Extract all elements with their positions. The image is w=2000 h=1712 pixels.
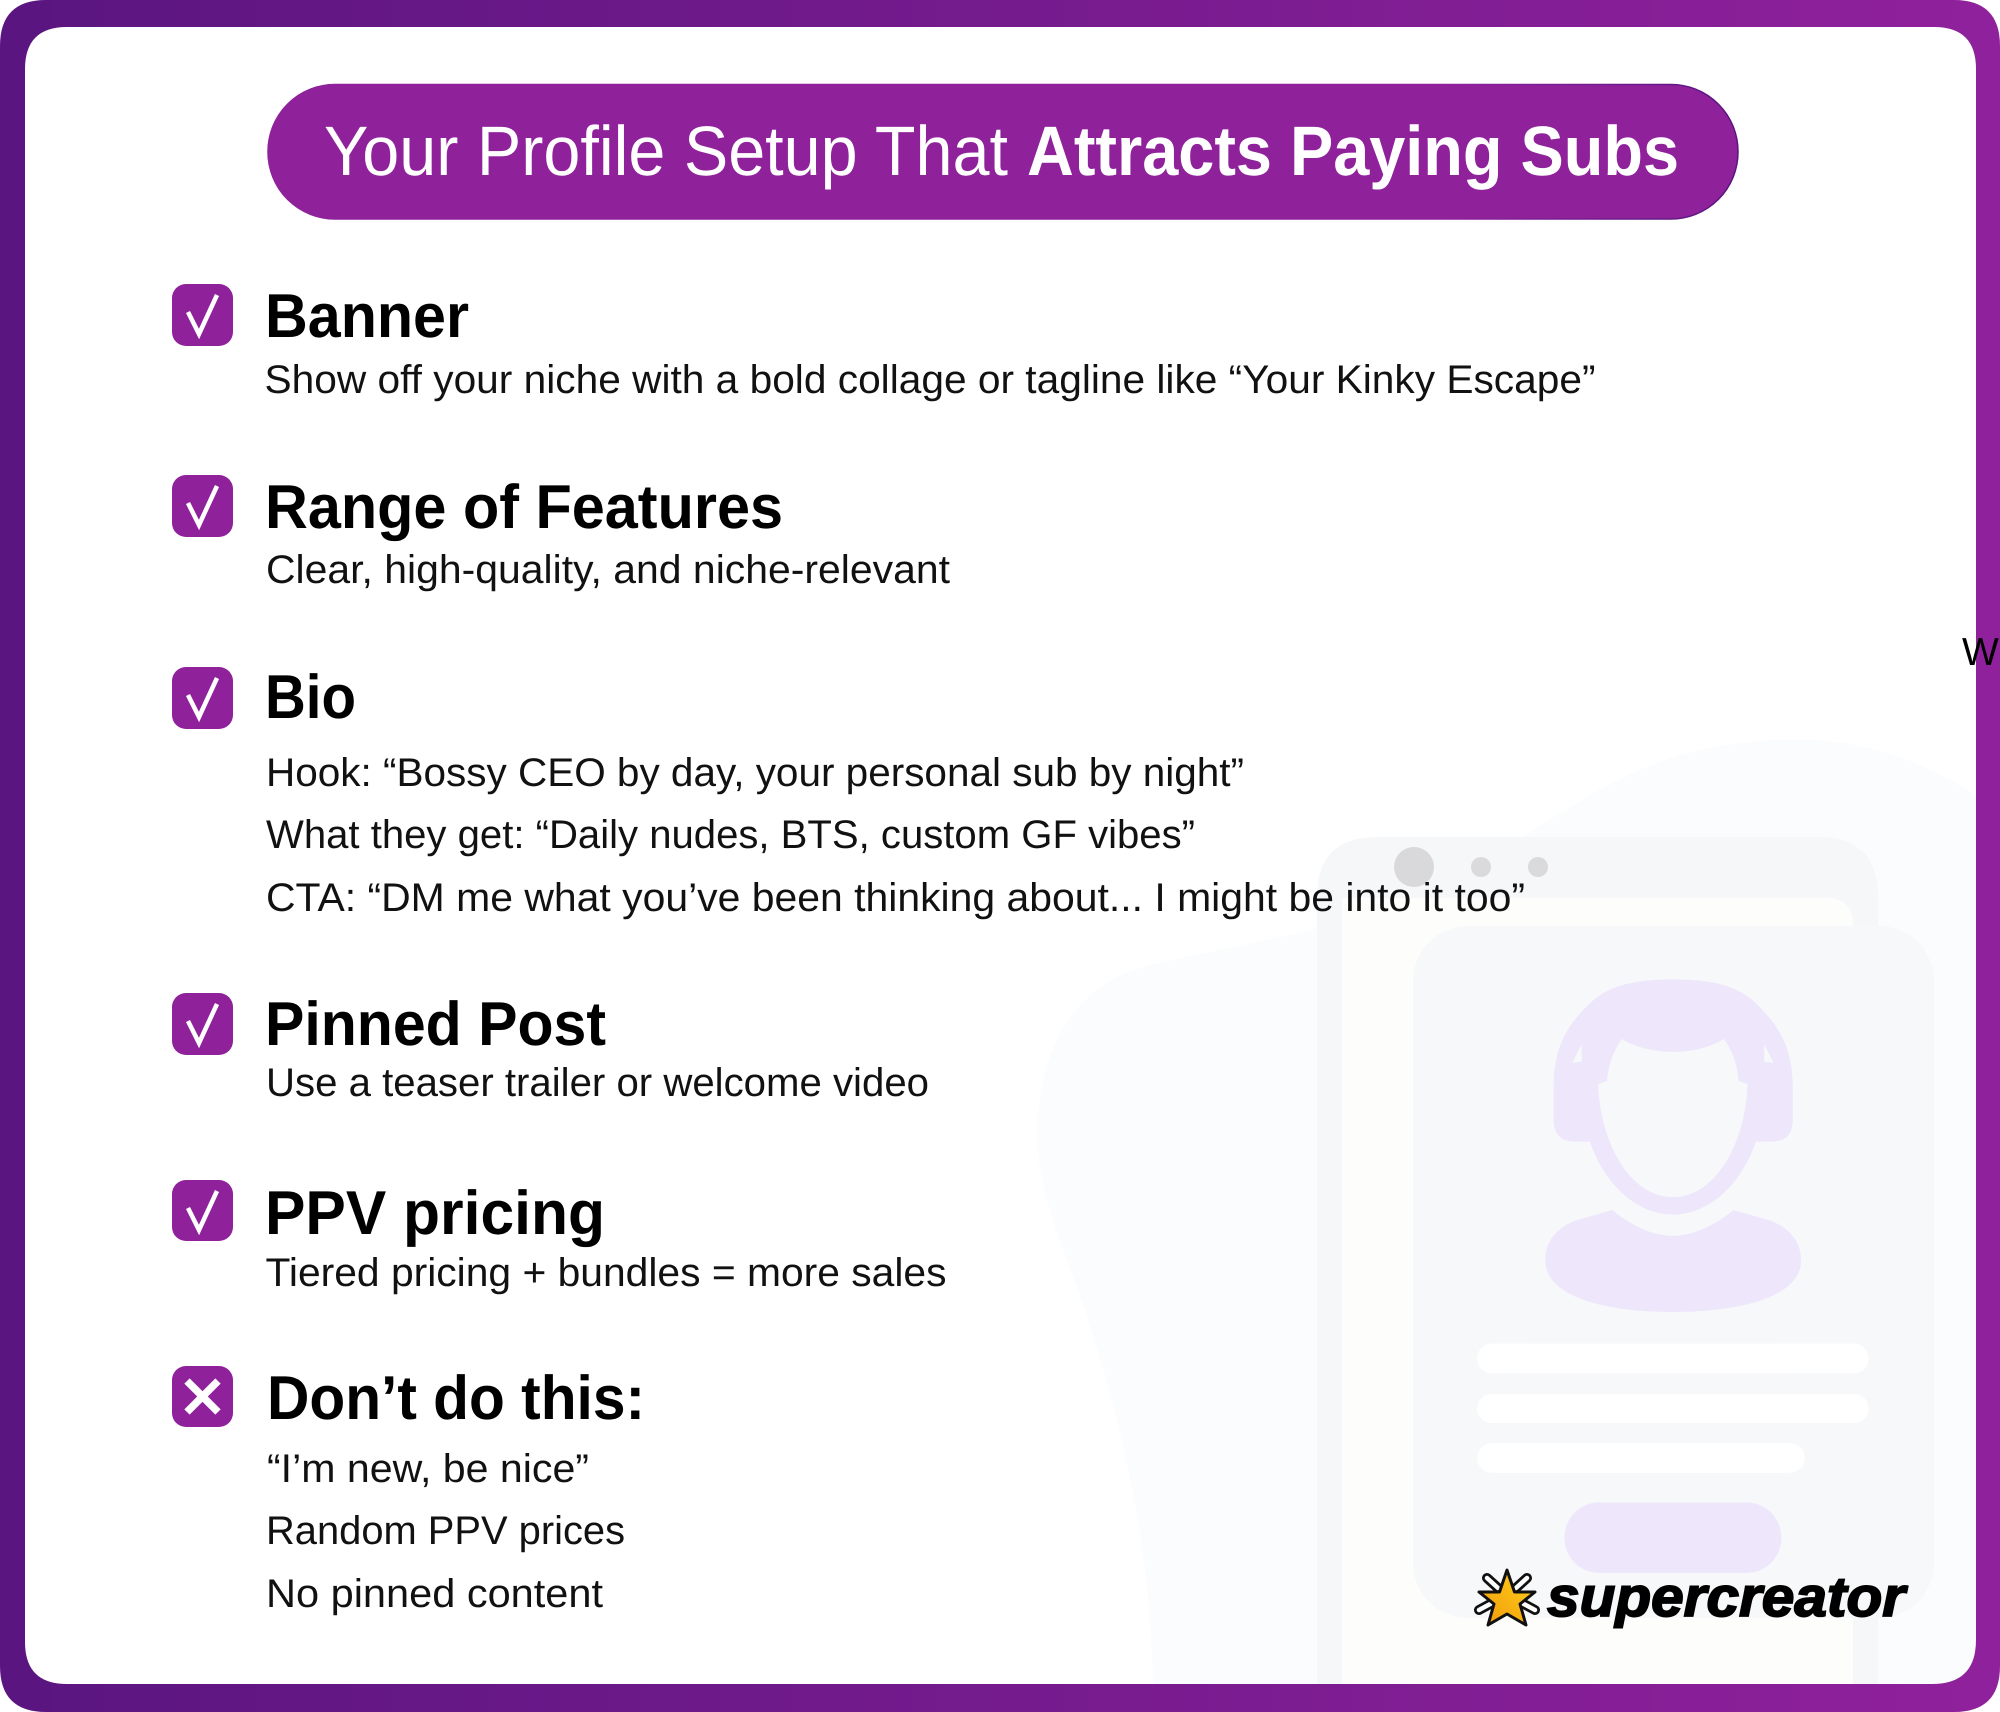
avatar left ear mark <box>1572 1044 1582 1063</box>
heading: Pinned Post: Pinned Post <box>265 990 606 1059</box>
description: Use a teaser trailer or welcome video <box>266 1061 929 1105</box>
description: Show off your niche with a bold collage or tagline like “Your Kinky Escape” <box>264 358 1596 402</box>
logo: Supercreator <box>1479 1565 1908 1628</box>
bio hook: Hook: “Bossy CEO by day, your personal sub by night” <box>266 751 1244 795</box>
icon: check <box>172 993 233 1055</box>
stray letter at right edge: W <box>1962 631 1999 674</box>
heading: Range of Features: Range of Features <box>265 473 783 542</box>
placeholder line 1 <box>1477 1344 1869 1373</box>
bio CTA: CTA: “DM me what you’ve been thinking about... I might be into it too” <box>266 876 1525 920</box>
phone dot large <box>1394 847 1434 887</box>
placeholder button <box>1564 1502 1781 1573</box>
heading: Don't do this: Don’t do this: <box>267 1364 645 1433</box>
item: Banner <box>172 282 1596 402</box>
phone dot middle <box>1471 857 1491 877</box>
background illustration: faded profile phone <box>1038 739 1976 1684</box>
placeholder line 2 <box>1477 1394 1869 1423</box>
phone frame <box>1317 837 1878 1684</box>
item: Bio <box>172 663 1525 920</box>
don't 2: Random PPV prices <box>266 1509 625 1553</box>
title bold part: Attracts Paying Subs <box>1027 112 1679 190</box>
profile card <box>1413 926 1934 1618</box>
item: Range of Features <box>172 473 950 592</box>
item: Don't do this <box>172 1364 645 1616</box>
placeholder line 3 <box>1477 1443 1805 1473</box>
icon: star burst <box>1479 1570 1535 1625</box>
icon: check <box>172 284 233 346</box>
avatar face <box>1598 1039 1748 1197</box>
description: Tiered pricing + bundles = more sales <box>266 1251 946 1295</box>
avatar right ear mark <box>1764 1044 1774 1063</box>
don't 1: “I’m new, be nice” <box>267 1447 589 1491</box>
heading: Bio: Bio <box>265 663 356 732</box>
bio what they get: What they get: “Daily nudes, BTS, custom GF vibes” <box>266 813 1195 857</box>
icon: check <box>172 475 233 537</box>
don't 3: No pinned content <box>266 1572 603 1616</box>
pill background <box>268 84 1738 219</box>
avatar hair and headphones <box>1554 980 1793 1215</box>
item: Pinned Post <box>172 990 929 1105</box>
icon: check <box>172 667 233 729</box>
phone dot right <box>1528 857 1548 877</box>
avatar shoulders <box>1545 1210 1801 1312</box>
background blob <box>1038 739 1976 1684</box>
avatar placeholder <box>1477 980 1869 1573</box>
title pill <box>268 84 1738 219</box>
icon: cross <box>172 1366 233 1427</box>
heading: Banner: Banner <box>265 282 469 351</box>
item: PPV pricing <box>172 1179 946 1295</box>
description: Clear, high-quality, and niche-relevant <box>266 548 950 592</box>
phone screen <box>1342 898 1853 1684</box>
logo wordmark: supercreator <box>1547 1565 1908 1628</box>
icon: check <box>172 1180 233 1241</box>
heading: PPV pricing: PPV pricing <box>265 1179 605 1248</box>
title light part: Your Profile Setup That <box>324 112 1008 190</box>
